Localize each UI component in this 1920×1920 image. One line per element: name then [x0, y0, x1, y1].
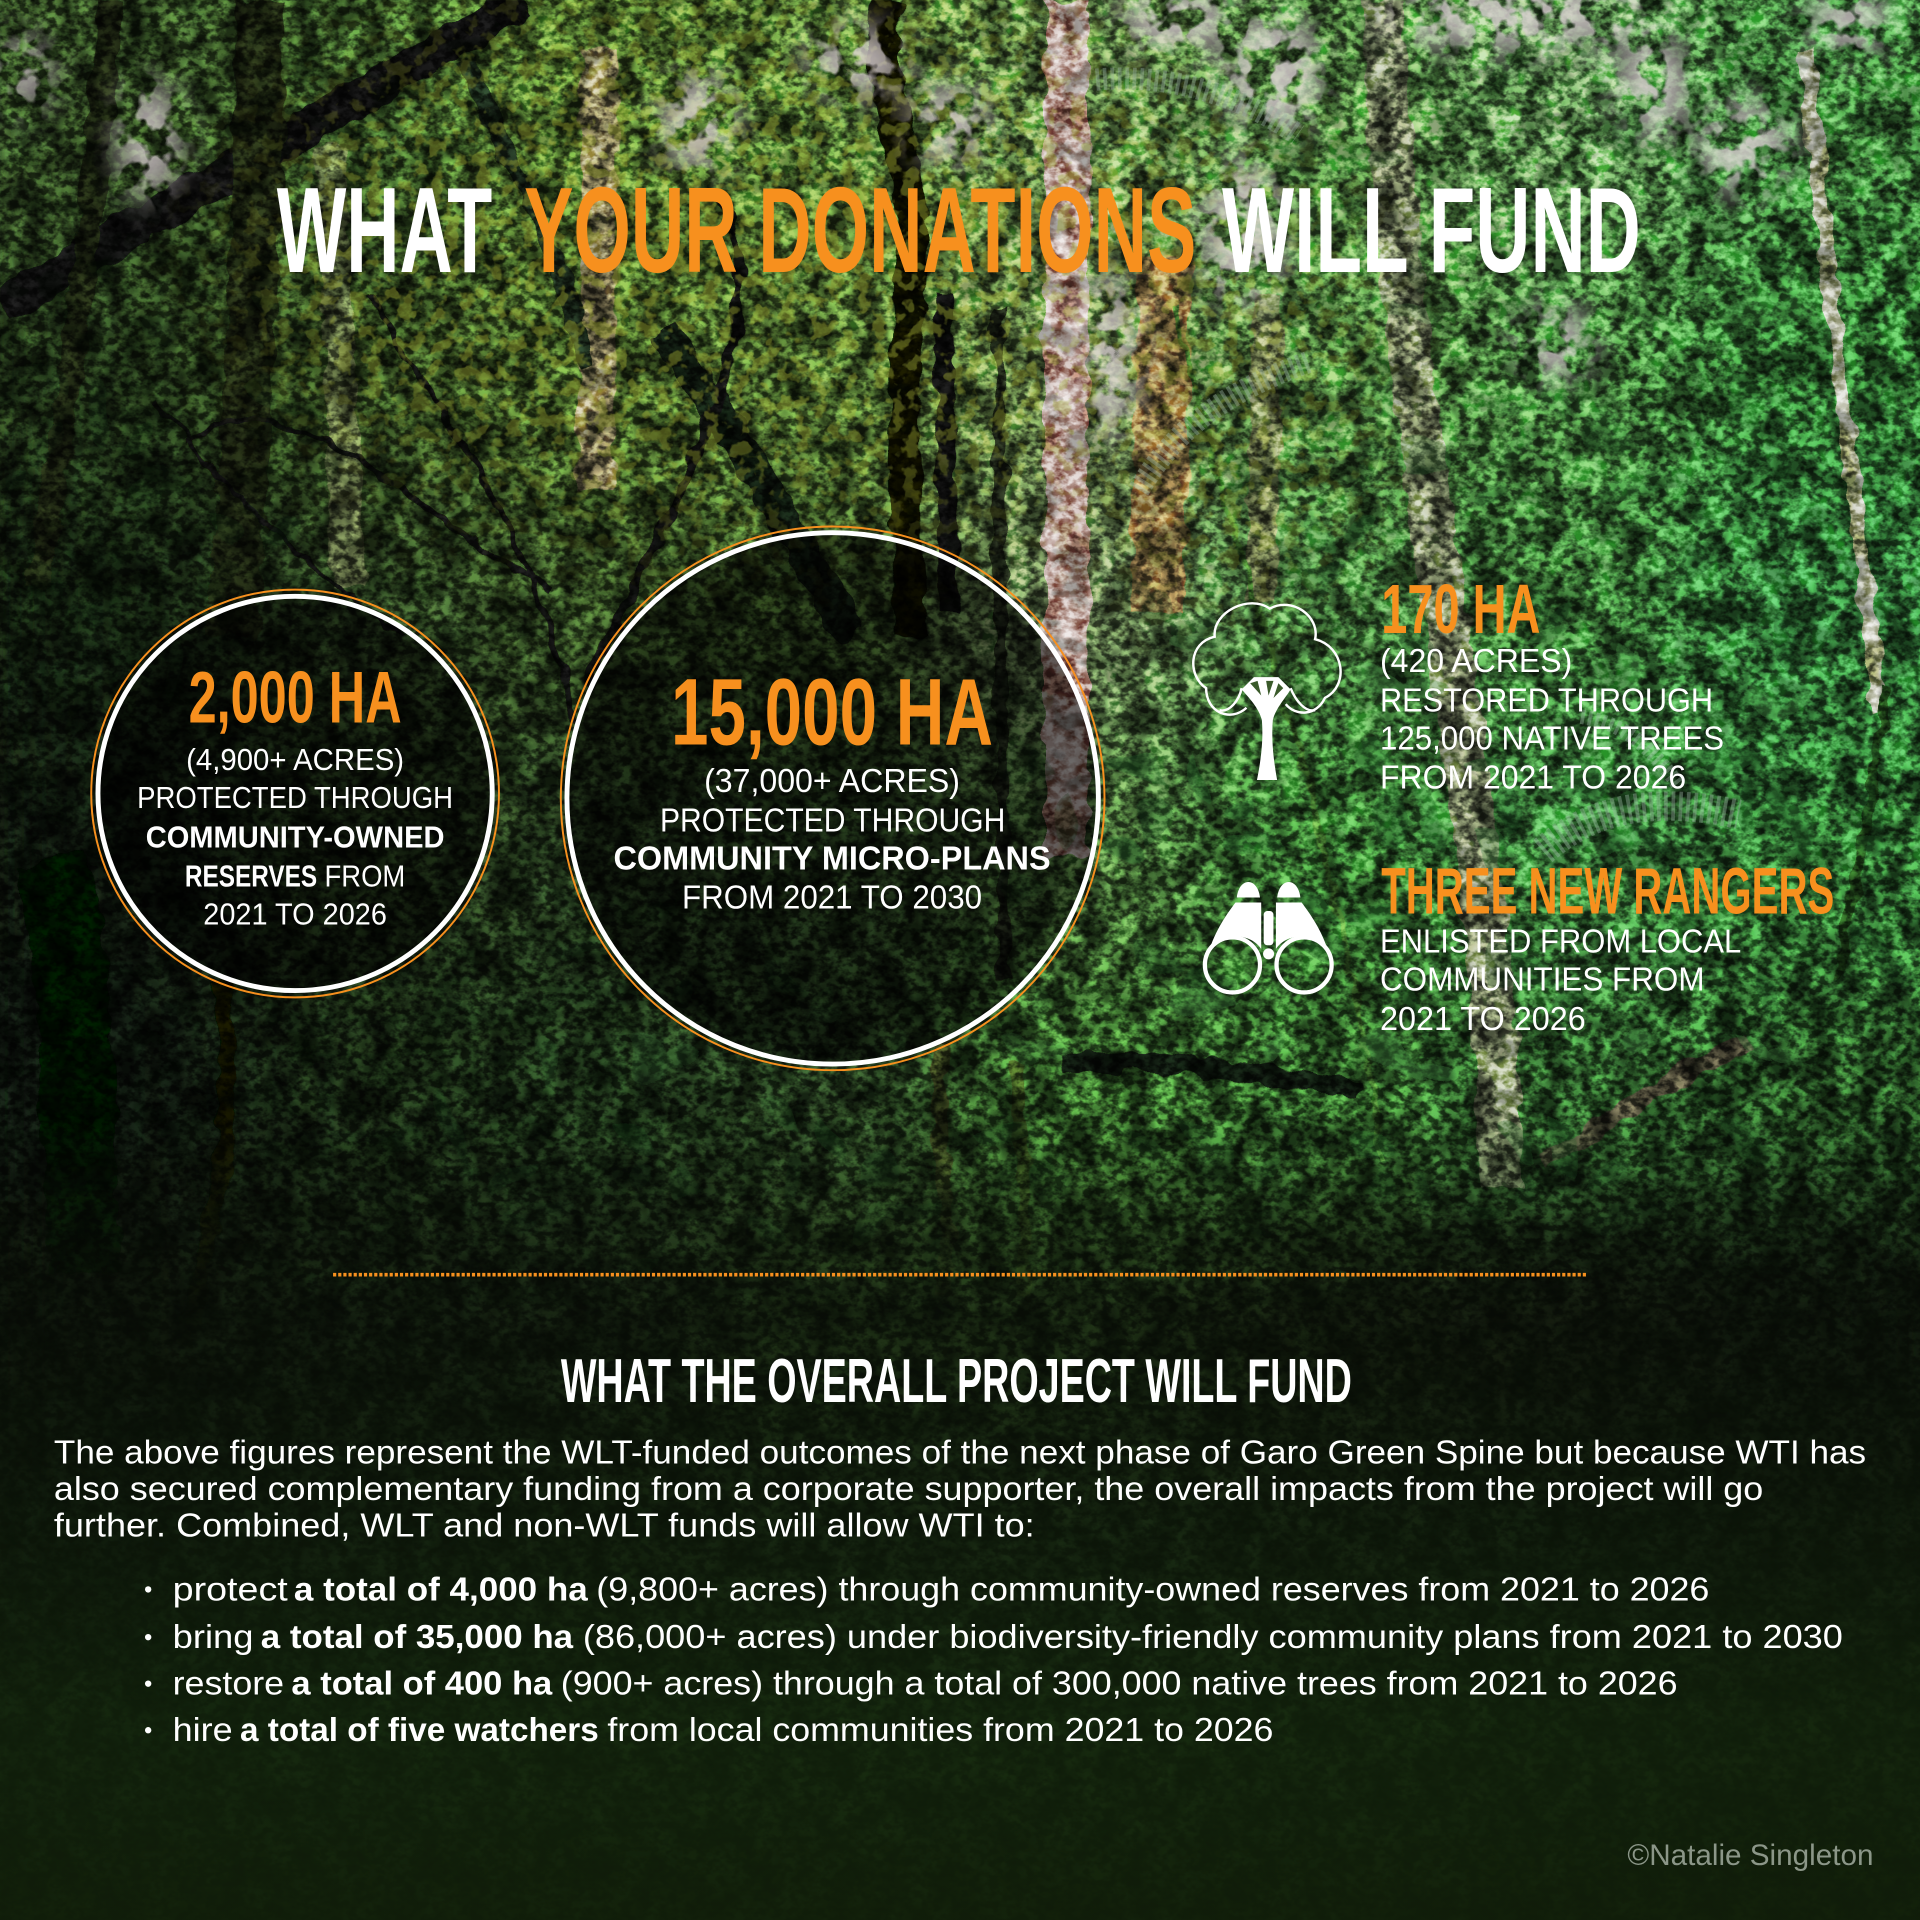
text block: 170 ha restored — [1380, 570, 1724, 797]
panel: 15,000 ha circle: COMMUNITY MICRO-PLANS — [613, 840, 1051, 877]
panel: 2,000 ha circle: RESERVES — [185, 860, 317, 894]
bullet list: bring — [173, 1619, 253, 1656]
title: YOUR DONATIONS — [524, 162, 1196, 298]
panel: 15,000 ha circle: (37,000+ ACRES) — [704, 763, 960, 800]
panel: 15,000 ha circle: FROM 2021 TO 2030 — [682, 880, 982, 917]
bullet list: (9,800+ acres) through community-owned reserves from 2021 to 2026 — [596, 1571, 1709, 1608]
text block: 170 ha restored: (420 ACRES) — [1380, 643, 1572, 680]
text block: intro paragraph: also secured complementary funding from a corporate supporter, the overall impacts from the project will go — [54, 1471, 1763, 1508]
bullet list: (86,000+ acres) under biodiversity-friendly community plans from 2021 to 2030 — [583, 1619, 1843, 1656]
panel: 15,000 ha circle — [561, 527, 1104, 1070]
panel: 2,000 ha circle: COMMUNITY-OWNED — [146, 820, 444, 854]
panel: 15,000 ha circle: 15,000 HA — [671, 659, 993, 764]
bullet list: (900+ acres) through a total of 300,000 native trees from 2021 to 2026 — [561, 1666, 1678, 1703]
bullet list: from local communities from 2021 to 2026 — [607, 1712, 1273, 1749]
panel: 2,000 ha circle: 2021 TO 2026 — [203, 897, 387, 931]
text block: intro paragraph — [54, 1434, 1866, 1545]
text block: intro paragraph: The above figures represent the WLT-funded outcomes of the next phase of Garo Green Spine but because WTI has — [54, 1434, 1866, 1471]
photo credit: ©Natalie Singleton — [1627, 1839, 1873, 1872]
text block: 170 ha restored: RESTORED THROUGH — [1380, 682, 1713, 719]
title: WHAT — [277, 162, 492, 298]
bullet list: a total of 400 ha — [291, 1666, 553, 1703]
panel: 2,000 ha circle: PROTECTED THROUGH — [137, 781, 453, 815]
icon: binoculars — [1205, 882, 1332, 992]
panel: 2,000 ha circle: FROM — [324, 860, 405, 894]
panel: 2,000 ha circle — [91, 590, 499, 997]
text block: 170 ha restored: FROM 2021 TO 2026 — [1380, 760, 1686, 797]
bullet list: restore — [173, 1666, 284, 1703]
title: WILL FUND — [1222, 162, 1641, 298]
bullet list: a total of 35,000 ha — [261, 1619, 574, 1656]
panel: 2,000 ha circle: (4,900+ ACRES) — [186, 743, 404, 777]
heading: overall project: WHAT THE OVERALL PROJECT WILL FUND — [561, 1346, 1352, 1416]
bullet list: a total of 4,000 ha — [294, 1571, 588, 1608]
panel: 15,000 ha circle: PROTECTED THROUGH — [660, 802, 1005, 839]
icon: tree — [1193, 603, 1341, 780]
text block: three new rangers: COMMUNITIES FROM — [1380, 962, 1704, 999]
text block: three new rangers: ENLISTED FROM LOCAL — [1380, 924, 1741, 961]
bullet list: protect — [173, 1571, 288, 1608]
text block: three new rangers — [1380, 854, 1834, 1038]
bullet list: a total of five watchers — [240, 1712, 599, 1749]
bullet list: hire — [173, 1712, 233, 1749]
text block: 170 ha restored: 170 HA — [1381, 570, 1540, 648]
text block: three new rangers: 2021 TO 2026 — [1380, 1001, 1586, 1038]
bullet list — [145, 1571, 1843, 1749]
text block: intro paragraph: further. Combined, WLT and non-WLT funds will allow WTI to: — [54, 1508, 1035, 1545]
panel: 2,000 ha circle: 2,000 HA — [189, 655, 402, 738]
text block: 170 ha restored: 125,000 NATIVE TREES — [1380, 720, 1724, 757]
